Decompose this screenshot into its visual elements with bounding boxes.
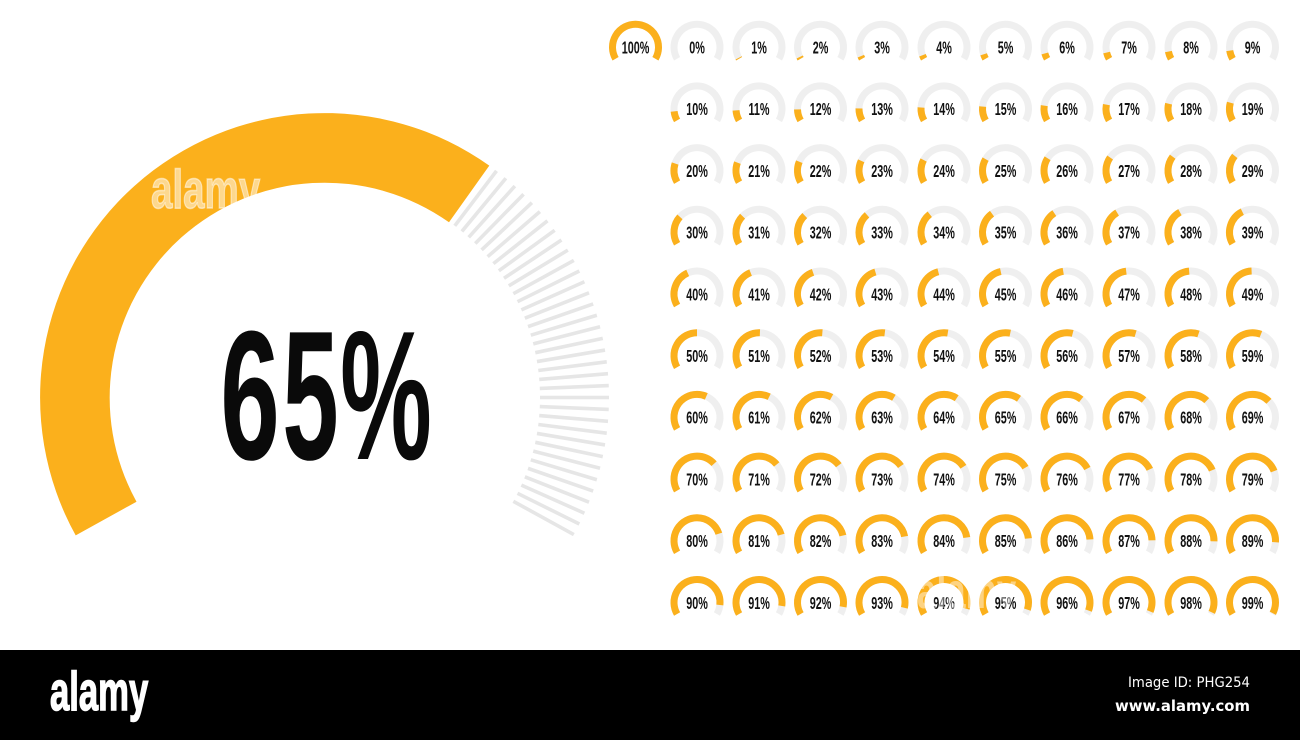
gauge 69%: 69%: [1242, 409, 1263, 429]
gauge 94%: 94%: [933, 594, 955, 614]
gauge 14%: [921, 86, 967, 120]
gauge 99%: 99%: [1242, 594, 1263, 614]
gauge 89%: [1230, 518, 1276, 552]
gauge 8%: [1168, 24, 1214, 59]
gauge 96%: [1044, 580, 1090, 614]
gauge 37%: [1106, 209, 1152, 244]
gauge 1%: 1%: [751, 39, 767, 58]
gauge 49%: 49%: [1242, 286, 1263, 305]
gauge 70%: 70%: [686, 471, 708, 490]
gauge 52%: [798, 333, 844, 367]
gauge 10%: 10%: [686, 101, 708, 120]
gauge 74%: 74%: [933, 471, 955, 490]
gauge 62%: 62%: [810, 409, 831, 429]
gauge 63%: [859, 394, 905, 429]
gauge 37%: 37%: [1118, 224, 1140, 243]
gauge 96%: 96%: [1056, 594, 1078, 614]
gauge 2%: 2%: [813, 39, 828, 58]
gauge 13%: [859, 86, 905, 120]
gauge 58%: 58%: [1180, 347, 1202, 367]
gauge 42%: [798, 271, 844, 306]
gauge 59%: 59%: [1242, 347, 1263, 367]
gauge 45%: [982, 271, 1028, 306]
gauge 47%: [1106, 271, 1152, 306]
gauge 0%: 0%: [689, 39, 705, 58]
gauge 5%: [982, 24, 1028, 59]
gauge 75%: 75%: [995, 471, 1016, 490]
gauge 46%: 46%: [1056, 286, 1078, 305]
watermark on arc: alamy: [151, 159, 261, 221]
gauge 73%: [859, 456, 905, 491]
gauge 63%: 63%: [871, 409, 893, 429]
gauge 72%: [798, 456, 844, 491]
gauge 61%: 61%: [748, 409, 770, 429]
gauge 4%: 4%: [936, 39, 952, 58]
large gauge: 65 percent: [40, 113, 609, 535]
gauge 15%: 15%: [995, 101, 1016, 120]
gauge 10%: [674, 86, 720, 120]
gauge 16%: 16%: [1056, 101, 1078, 120]
gauge 40%: 40%: [686, 286, 708, 305]
gauge 27%: 27%: [1118, 162, 1140, 182]
gauge 50%: 50%: [686, 347, 708, 367]
gauge 65%: 65%: [995, 409, 1016, 429]
gauge 11%: [736, 86, 782, 120]
gauge 39%: [1230, 209, 1276, 244]
gauge 12%: [798, 86, 844, 120]
gauge 7%: [1106, 24, 1152, 59]
gauge 30%: 30%: [686, 224, 708, 243]
gauge 24%: [921, 148, 967, 182]
gauge 57%: 57%: [1118, 347, 1140, 367]
gauge 57%: [1106, 333, 1152, 367]
gauge 4%: [921, 24, 967, 59]
gauge 54%: [921, 333, 967, 367]
gauge 32%: [798, 209, 844, 244]
gauge 92%: [798, 580, 844, 614]
gauge 95%: 95%: [995, 594, 1016, 614]
gauge 13%: 13%: [871, 101, 893, 120]
gauge 78%: 78%: [1180, 471, 1202, 490]
gauge 82%: [798, 518, 844, 552]
gauge 17%: 17%: [1118, 101, 1140, 120]
gauge 6%: [1044, 24, 1090, 59]
gauge 24%: 24%: [933, 162, 955, 182]
gauge 100%: 100%: [622, 39, 649, 58]
gauge 56%: [1044, 333, 1090, 367]
gauge 89%: 89%: [1242, 533, 1263, 552]
gauge 77%: [1106, 456, 1152, 491]
gauge 88%: [1168, 518, 1214, 552]
gauge 7%: 7%: [1121, 39, 1137, 58]
gauge 3%: 3%: [874, 39, 890, 58]
gauge 84%: [921, 518, 967, 552]
gauge 98%: [1168, 580, 1214, 614]
gauge 51%: [736, 333, 782, 367]
gauge 5%: 5%: [998, 39, 1013, 58]
gauge 17%: [1106, 86, 1152, 120]
gauge 88%: 88%: [1180, 533, 1202, 552]
gauge 55%: [982, 333, 1028, 367]
gauge 87%: 87%: [1118, 533, 1140, 552]
gauge 87%: [1106, 518, 1152, 552]
gauge 12%: 12%: [810, 101, 831, 120]
gauge 35%: [982, 209, 1028, 244]
footer band: [0, 650, 1300, 740]
gauge 79%: [1230, 456, 1276, 491]
gauge 90%: [674, 580, 720, 614]
gauge 76%: [1044, 456, 1090, 491]
gauge 85%: [982, 518, 1028, 552]
gauge 81%: [736, 518, 782, 552]
gauge 23%: 23%: [871, 162, 893, 182]
gauge 9%: 9%: [1245, 39, 1260, 58]
gauge 91%: [736, 580, 782, 614]
gauge 16%: [1044, 86, 1090, 120]
gauge 98%: 98%: [1180, 594, 1202, 614]
gauge 62%: [798, 394, 844, 429]
gauge 58%: [1168, 333, 1214, 367]
gauge 6%: 6%: [1059, 39, 1075, 58]
gauge 41%: [736, 271, 782, 306]
gauge 93%: [859, 580, 905, 614]
value label: 6: [220, 293, 280, 498]
gauge 33%: 33%: [871, 224, 893, 243]
gauge 52%: 52%: [810, 347, 831, 367]
gauge 46%: [1044, 271, 1090, 306]
gauge 77%: 77%: [1118, 471, 1140, 490]
gauge 84%: 84%: [933, 533, 955, 552]
gauge 79%: 79%: [1242, 471, 1263, 490]
gauge 45%: 45%: [995, 286, 1016, 305]
gauge 41%: 41%: [748, 286, 770, 305]
gauge 36%: [1044, 209, 1090, 244]
gauge 20%: 20%: [686, 162, 708, 182]
gauge 48%: [1168, 271, 1214, 306]
gauge 22%: [798, 148, 844, 182]
gauge 34%: 34%: [933, 224, 955, 243]
gauge 64%: [921, 394, 967, 429]
gauge 97%: [1106, 580, 1152, 614]
gauge 43%: 43%: [871, 286, 893, 305]
footer logo: alamy: [50, 660, 149, 722]
gauge 76%: 76%: [1056, 471, 1078, 490]
gauge 65%: [982, 394, 1028, 429]
gauge 56%: 56%: [1056, 347, 1078, 367]
gauge 34%: [921, 209, 967, 244]
gauge 55%: 55%: [995, 347, 1016, 367]
gauge 38%: [1168, 209, 1214, 244]
gauge 3%: [859, 24, 905, 59]
value label: [220, 292, 432, 499]
gauge 61%: [736, 394, 782, 429]
gauge 72%: 72%: [810, 471, 831, 490]
gauge 23%: [859, 148, 905, 182]
gauge 29%: [1230, 148, 1276, 182]
gauge 60%: [674, 394, 720, 429]
watermark over gauges 94 and 95: alamy: [917, 564, 1016, 620]
gauge 71%: 71%: [748, 471, 770, 490]
gauge 95%: [982, 580, 1028, 614]
gauge 9%: [1230, 24, 1276, 59]
gauge 53%: 53%: [871, 347, 893, 367]
gauge 83%: 83%: [871, 533, 893, 552]
gauge 42%: 42%: [810, 286, 831, 305]
gauge 0%: [674, 24, 720, 59]
gauge 100%: [612, 24, 658, 59]
value label: %: [340, 292, 432, 498]
gauge 38%: 38%: [1180, 224, 1202, 243]
gauge 60%: 60%: [686, 409, 708, 429]
gauge 30%: [674, 209, 720, 244]
grid of small percentage gauges: [612, 24, 1276, 614]
gauge 81%: 81%: [748, 533, 770, 552]
gauge 68%: 68%: [1180, 409, 1202, 429]
gauge 21%: 21%: [748, 162, 770, 182]
gauge 19%: 19%: [1242, 101, 1263, 120]
gauge 36%: 36%: [1056, 224, 1078, 243]
gauge 80%: [674, 518, 720, 552]
gauge 28%: [1168, 148, 1214, 182]
gauge 35%: 35%: [995, 224, 1016, 243]
gauge 67%: 67%: [1118, 409, 1140, 429]
gauge 31%: 31%: [748, 224, 770, 243]
gauge 66%: 66%: [1056, 409, 1078, 429]
gauge 22%: 22%: [810, 162, 831, 182]
gauge 70%: [674, 456, 720, 491]
gauge 82%: 82%: [810, 533, 831, 552]
gauge 94%: [921, 580, 967, 614]
gauge 8%: 8%: [1183, 39, 1199, 58]
gauge 27%: [1106, 148, 1152, 182]
gauge 64%: 64%: [933, 409, 955, 429]
gauge 86%: [1044, 518, 1090, 552]
gauge 71%: [736, 456, 782, 491]
gauge 2%: [798, 24, 844, 59]
gauge 93%: 93%: [871, 594, 893, 614]
gauge 14%: 14%: [933, 101, 955, 120]
gauge 83%: [859, 518, 905, 552]
gauge 39%: 39%: [1242, 224, 1263, 243]
gauge 15%: [982, 86, 1028, 120]
gauge 40%: [674, 271, 720, 306]
gauge 31%: [736, 209, 782, 244]
gauge 67%: [1106, 394, 1152, 429]
gauge 68%: [1168, 394, 1214, 429]
gauge 59%: [1230, 333, 1276, 367]
gauge 50%: [674, 333, 720, 367]
gauge 19%: [1230, 86, 1276, 120]
gauge 33%: [859, 209, 905, 244]
gauge 80%: 80%: [686, 533, 708, 552]
gauge 74%: [921, 456, 967, 491]
gauge 69%: [1230, 394, 1276, 429]
gauge 92%: 92%: [810, 594, 831, 614]
gauge 25%: 25%: [995, 162, 1016, 182]
gauge 99%: [1230, 580, 1276, 614]
gauge 32%: 32%: [810, 224, 831, 243]
gauge 1%: [736, 24, 782, 59]
gauge 51%: 51%: [748, 347, 770, 367]
gauge 44%: [921, 271, 967, 306]
gauge 43%: [859, 271, 905, 306]
gauge 91%: 91%: [748, 594, 770, 614]
gauge 47%: 47%: [1118, 286, 1140, 305]
gauge 49%: [1230, 271, 1276, 306]
site url: www.alamy.com: [1115, 697, 1250, 715]
gauge 20%: [674, 148, 720, 182]
gauge 26%: [1044, 148, 1090, 182]
value label: 5: [282, 294, 339, 499]
gauge 78%: [1168, 456, 1214, 491]
gauge 54%: 54%: [933, 347, 955, 367]
gauge 48%: 48%: [1180, 286, 1202, 305]
gauge 86%: 86%: [1056, 533, 1078, 552]
gauge 11%: 11%: [749, 101, 769, 120]
image id: Image ID: PHG254: [1128, 675, 1250, 691]
gauge 66%: [1044, 394, 1090, 429]
gauge 44%: 44%: [933, 286, 955, 305]
grey tick marks for the remaining 35 percent: [455, 171, 609, 535]
gauge 21%: [736, 148, 782, 182]
gauge 85%: 85%: [995, 533, 1016, 552]
orange value arc: [40, 113, 489, 535]
gauge 18%: 18%: [1180, 101, 1202, 120]
gauge 25%: [982, 148, 1028, 182]
gauge 26%: 26%: [1056, 162, 1078, 182]
gauge 75%: [982, 456, 1028, 491]
gauge 29%: 29%: [1242, 162, 1263, 182]
gauge 18%: [1168, 86, 1214, 120]
gauge 97%: 97%: [1118, 594, 1140, 614]
gauge 28%: 28%: [1180, 162, 1202, 182]
gauge 53%: [859, 333, 905, 367]
gauge 90%: 90%: [686, 594, 708, 614]
gauge 73%: 73%: [871, 471, 893, 490]
